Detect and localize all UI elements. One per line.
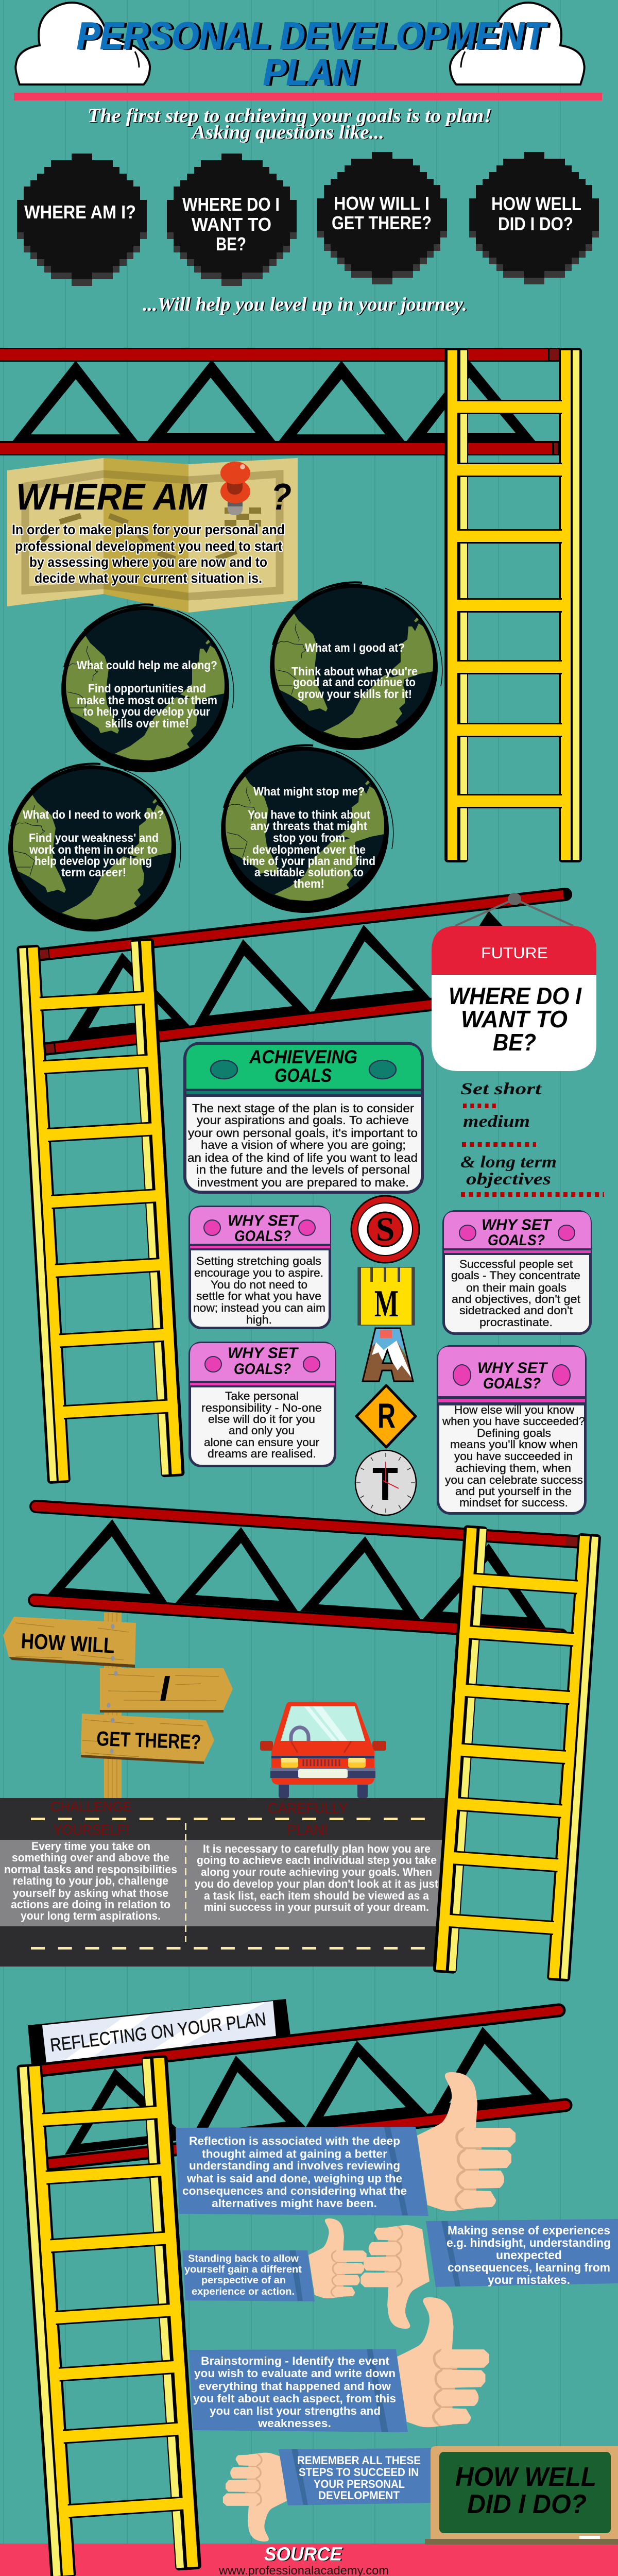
- ladder 1: [444, 348, 582, 862]
- card: why set goals 2: Successful people set: [459, 1258, 573, 1270]
- panel: globe what am I good at: What am I good at?: [305, 641, 405, 654]
- ladder 3: [433, 1525, 601, 1982]
- card: why set goals 2: procrastinate.: [479, 1316, 553, 1329]
- callout: making sense thumb down: consequences, learning from: [448, 2261, 610, 2274]
- intro text: The first step to achieving your goals is to plan!: [88, 105, 492, 127]
- card: why set goals 4: you can celebrate success: [445, 1473, 583, 1486]
- callout: brainstorming thumb up: [189, 2297, 489, 2432]
- card: achieving goals: in the future and the levels of personal: [196, 1163, 410, 1176]
- text: challenge yourself: normal tasks and responsibilities: [4, 1863, 177, 1876]
- text: short medium long term objectives: & long term: [460, 1153, 557, 1172]
- question badge: where do I want to be: WHERE DO I: [182, 194, 280, 215]
- sign: I: I: [160, 1668, 170, 1708]
- source heading: SOURCE: [264, 2544, 342, 2565]
- text: short medium long term objectives: [460, 1080, 604, 1194]
- callout: reflection thumb up: understanding and involves reviewing: [189, 2159, 400, 2172]
- text: carefully plan: [195, 1842, 439, 1913]
- icon: left cloud: [15, 3, 150, 84]
- panel: globe what could help me along: to help you develop your: [83, 705, 210, 718]
- panel: globe what am I good at: Think about what you're: [291, 665, 418, 678]
- truss 1: [0, 348, 560, 455]
- icon: T clock: T: [372, 1459, 398, 1510]
- question badge: where am I: [17, 154, 147, 286]
- text: challenge yourself: yourself by asking what those: [13, 1887, 168, 1900]
- panel: globe what do I need to work on: term career!: [61, 866, 126, 879]
- card: why set goals 2: and objectives, don't get: [452, 1293, 580, 1306]
- question badge: how will I get there: HOW WILL I: [334, 193, 430, 214]
- card: achieving goals: an idea of the kind of life you want to lead: [187, 1151, 418, 1164]
- card: why set goals 3: dreams are realised.: [208, 1447, 316, 1460]
- question badge: how well did I do: HOW WELL: [491, 193, 581, 214]
- hanging sign: future: WANT TO: [461, 1006, 568, 1032]
- card: why set goals 4: [438, 1347, 585, 1514]
- title: PLAN: [263, 53, 358, 93]
- text: challenge yourself: [4, 1840, 177, 1922]
- card: achieving goals: have a vision of where you are going;: [201, 1138, 406, 1151]
- sign: reflecting on your plan: [28, 1999, 290, 2065]
- heading: where am: WHERE AM: [16, 477, 208, 518]
- card: why set goals 2: [444, 1212, 591, 1333]
- callout: remember thumb down: YOUR PERSONAL: [314, 2478, 405, 2490]
- intro text: [88, 105, 492, 143]
- panel: globe what might stop me: a suitable solution to: [254, 866, 364, 879]
- panel: globe what might stop me: development over the: [252, 843, 366, 856]
- panel: globe what do I need to work on: Find your weakness' and: [29, 831, 159, 844]
- text: carefully plan: a task list, each item should be viewed as a: [204, 1889, 430, 1902]
- question badge: how well did I do: [469, 152, 599, 284]
- truss 2: [39, 894, 565, 1049]
- callout: reflection thumb up: thought aimed at gaining a better: [202, 2147, 387, 2160]
- question badge: where am I: WHERE AM I?: [24, 201, 136, 223]
- sign post: [104, 1613, 122, 1798]
- panel: globe what am I good at: grow your skills for it!: [298, 687, 412, 701]
- text: short medium long term objectives: Set short: [460, 1080, 542, 1098]
- card: why set goals 4: when you have succeeded?: [442, 1415, 585, 1428]
- card: why set goals 4: and put yourself in the: [455, 1485, 572, 1498]
- text: carefully plan: It is necessary to carefully plan how you are: [203, 1842, 431, 1855]
- card: achieving goals: ACHIEVEING: [249, 1046, 357, 1067]
- callout: remember thumb down: REMEMBER ALL THESE: [297, 2454, 421, 2467]
- text: short medium long term objectives: objectives: [466, 1170, 551, 1189]
- icon: S target: [351, 1196, 419, 1263]
- card: achieving goals: your aspirations and goals. To achieve: [197, 1113, 409, 1127]
- icon: M ruler: M: [374, 1283, 399, 1325]
- panel: globe what might stop me: What might stop me?: [253, 785, 365, 798]
- callout: standing back thumb up: [182, 2218, 367, 2301]
- title: PERSONAL DEVELOPMENT: [77, 14, 548, 57]
- icon: R road sign: R: [377, 1396, 396, 1435]
- signpost: [3, 1613, 233, 1798]
- sign: I: [100, 1668, 233, 1713]
- card: achieving goals: investment you are prepared to make.: [197, 1176, 409, 1189]
- text: challenge yourself: something over and above the: [12, 1851, 169, 1864]
- callout: standing back thumb up: Standing back to allow: [188, 2253, 299, 2264]
- callout: reflection thumb up: Reflection is associated with the deep: [189, 2134, 400, 2147]
- intro text: Asking questions like...: [191, 122, 384, 143]
- heading: where am: ?: [271, 477, 291, 518]
- hanging sign: future: FUTURE: [481, 944, 548, 962]
- road panel: [0, 1798, 448, 1967]
- intro paragraph: professional development you need to start: [15, 538, 282, 554]
- intro paragraph: by assessing where you are now and to: [29, 554, 267, 570]
- callout: brainstorming thumb up: you felt about each aspect, from this: [193, 2392, 396, 2405]
- card: why set goals 3: Take personal: [225, 1389, 299, 1402]
- text: challenge yourself: your long term aspirations.: [21, 1909, 161, 1922]
- card: why set goals 1: [190, 1207, 330, 1328]
- callout: brainstorming thumb up: you can list your strengths and: [210, 2404, 381, 2417]
- card: why set goals 1: You do not need to: [211, 1278, 307, 1291]
- card: why set goals 2: on their main goals: [466, 1281, 566, 1294]
- question badge: where do I want to be: BE?: [216, 233, 246, 255]
- callout: making sense thumb down: Making sense of experiences: [448, 2224, 610, 2237]
- hanging sign: future: WHERE DO I: [449, 982, 582, 1009]
- callout: making sense thumb down: [360, 2219, 618, 2329]
- icon: T clock: [355, 1450, 416, 1515]
- card: why set goals 4: means you'll know when: [450, 1438, 578, 1451]
- icon: right cloud: [450, 3, 585, 84]
- panel: globe what might stop me: them!: [294, 877, 324, 890]
- card: why set goals 3: GOALS?: [234, 1361, 291, 1378]
- chalkboard: how well did I do: HOW WELL: [455, 2462, 596, 2492]
- intro closing text: ...Will help you level up in your journey.: [143, 294, 467, 315]
- icon: red car: [260, 1702, 386, 1798]
- ladder 2: [16, 938, 185, 1484]
- card: why set goals 4: mindset for success.: [459, 1496, 568, 1509]
- card: why set goals 3: [190, 1343, 335, 1466]
- sign: how will: HOW WILL: [21, 1629, 115, 1658]
- text: challenge yourself: actions are doing in relation to: [11, 1898, 170, 1911]
- callout: remember thumb down: [223, 2448, 432, 2541]
- card: why set goals 2: goals - They concentrate: [451, 1269, 580, 1282]
- sign: how will: [3, 1617, 136, 1668]
- icon: map pin: [220, 462, 250, 515]
- card: achieving goals: your own personal goals, it's important to: [188, 1126, 418, 1140]
- card: why set goals 3: WHY SET: [228, 1345, 299, 1362]
- icon: A mountain: [362, 1327, 414, 1382]
- panel: where am I map: [7, 458, 298, 613]
- callout: brainstorming thumb up: Brainstorming - Identify the event: [201, 2354, 390, 2367]
- panel: globe what do I need to work on: What do I need to work on?: [23, 808, 164, 821]
- card: why set goals 4: GOALS?: [483, 1375, 541, 1392]
- card: why set goals 2: GOALS?: [488, 1232, 545, 1249]
- panel: globe what do I need to work on: work on them in order to: [29, 843, 158, 856]
- title underline bar: [14, 93, 602, 100]
- heading: challenge yourself: [50, 1799, 132, 1838]
- question badge: how well did I do: DID I DO?: [498, 213, 573, 234]
- callout: remember thumb down: DEVELOPMENT: [318, 2489, 400, 2502]
- card: why set goals 3: else will do it for you: [208, 1413, 315, 1426]
- callout: reflection thumb up: what is said and done, weighing up the: [186, 2172, 402, 2185]
- card: achieving goals: [185, 1043, 422, 1192]
- panel: globe what could help me along: make the most out of them: [77, 693, 217, 707]
- panel: globe what could help me along: Find opportunities and: [88, 682, 206, 695]
- heading: carefully plan: PLAN!: [287, 1822, 328, 1838]
- panel: globe what could help me along: skills over time!: [105, 717, 189, 730]
- text: challenge yourself: Every time you take on: [31, 1840, 150, 1853]
- panel: globe what do I need to work on: help develop your long: [35, 854, 152, 868]
- title: [77, 14, 548, 93]
- intro paragraph: In order to make plans for your personal and: [12, 522, 285, 537]
- chalkboard: how well did I do: [425, 2446, 618, 2545]
- sign: get there: [81, 1714, 214, 1764]
- sign: reflecting on your plan: REFLECTING ON YOUR PLAN: [49, 2008, 267, 2056]
- heading: challenge yourself: CHALLENGE: [50, 1799, 132, 1815]
- text: challenge yourself: relating to your job, challenge: [13, 1874, 168, 1887]
- truss 4: [41, 2010, 565, 2164]
- hanging sign: future: BE?: [493, 1029, 536, 1056]
- text: carefully plan: you do develop your plan don't look at it as just: [195, 1877, 439, 1890]
- callout: reflection thumb up: [176, 2072, 516, 2216]
- icon: S target: S: [376, 1211, 394, 1248]
- heading: challenge yourself: YOURSELF!: [53, 1822, 129, 1838]
- sign: get there: GET THERE?: [96, 1727, 201, 1754]
- panel: globe what might stop me: any threats that might: [250, 819, 367, 833]
- heading: carefully plan: [268, 1800, 348, 1838]
- icon: M ruler: [358, 1267, 415, 1325]
- ladder 4: [16, 2055, 201, 2576]
- callout: reflection thumb up: consequences and considering what the: [182, 2184, 407, 2197]
- card: why set goals 3: responsibility - No-one: [201, 1401, 322, 1414]
- card: why set goals 1: GOALS?: [234, 1228, 291, 1245]
- question badge: where do I want to be: WANT TO: [192, 214, 271, 235]
- truss 3: [35, 1506, 577, 1635]
- callout: standing back thumb up: experience or action.: [192, 2286, 295, 2297]
- intro paragraph: decide what your current situation is.: [35, 570, 262, 586]
- card: why set goals 4: Defining goals: [477, 1427, 551, 1439]
- callout: standing back thumb up: perspective of an: [201, 2275, 286, 2286]
- intro paragraph: [12, 522, 285, 586]
- text: carefully plan: going to achieve each individual step you take: [197, 1854, 437, 1867]
- card: why set goals 1: encourage you to aspire.: [194, 1266, 323, 1279]
- panel: globe what might stop me: stop you from: [273, 831, 345, 844]
- hanging sign: future: [432, 893, 596, 1071]
- callout: brainstorming thumb up: weaknesses.: [258, 2417, 331, 2430]
- icon: R road sign: [356, 1385, 416, 1447]
- text: carefully plan: mini success in your pursuit of your dream.: [204, 1901, 429, 1913]
- card: why set goals 1: Setting stretching goals: [196, 1255, 321, 1267]
- question badge: how will I get there: GET THERE?: [332, 212, 432, 233]
- callout: brainstorming thumb up: you wish to evaluate and write down: [194, 2367, 396, 2380]
- callout: remember thumb down: STEPS TO SUCCEED IN: [299, 2466, 419, 2479]
- callout: making sense thumb down: unexpected: [496, 2248, 562, 2262]
- card: achieving goals: GOALS: [274, 1065, 332, 1086]
- card: why set goals 4: you have succeeded in: [454, 1450, 573, 1463]
- heading: carefully plan: CAREFULLY: [268, 1800, 348, 1816]
- callout: brainstorming thumb up: everything that happened and how: [199, 2380, 391, 2393]
- card: achieving goals: The next stage of the plan is to consider: [192, 1101, 414, 1115]
- text: carefully plan: along your route achieving your goals. When: [201, 1866, 432, 1878]
- chalkboard: how well did I do: DID I DO?: [467, 2489, 587, 2519]
- panel: globe what might stop me: [221, 745, 393, 913]
- card: why set goals 2: sidetracked and don't: [459, 1304, 573, 1317]
- footer band: [0, 2544, 618, 2576]
- card: why set goals 3: and only you: [229, 1424, 295, 1437]
- panel: globe what might stop me: You have to think about: [248, 808, 370, 821]
- panel: globe what do I need to work on: [8, 764, 181, 931]
- card: why set goals 1: WHY SET: [228, 1212, 299, 1229]
- card: why set goals 1: high.: [246, 1313, 272, 1326]
- callout: reflection thumb up: alternatives might have been.: [212, 2197, 377, 2210]
- card: why set goals 1: now; instead you can aim: [193, 1301, 325, 1314]
- panel: globe what am I good at: [270, 582, 442, 750]
- card: why set goals 4: achieving them, when: [456, 1462, 571, 1475]
- card: why set goals 3: alone can ensure your: [204, 1436, 319, 1449]
- panel: globe what could help me along: [61, 604, 234, 772]
- text: short medium long term objectives: medium: [463, 1112, 530, 1131]
- question badge: how will I get there: [317, 152, 447, 284]
- callout: making sense thumb down: your mistakes.: [488, 2273, 570, 2286]
- panel: globe what am I good at: good at and continue to: [293, 675, 416, 689]
- card: why set goals 2: WHY SET: [482, 1216, 553, 1233]
- map illustration: [7, 458, 298, 613]
- callout: standing back thumb up: yourself gain a different: [184, 2264, 302, 2275]
- panel: globe what could help me along: What could help me along?: [77, 658, 217, 672]
- callout: making sense thumb down: e.g. hindsight, understanding: [447, 2236, 611, 2249]
- card: why set goals 1: settle for what you have: [196, 1290, 321, 1302]
- card: why set goals 4: WHY SET: [477, 1360, 548, 1377]
- question badge: where do I want to be: [167, 154, 297, 286]
- card: why set goals 4: How else will you know: [454, 1403, 574, 1416]
- panel: globe what might stop me: time of your plan and find: [243, 854, 375, 868]
